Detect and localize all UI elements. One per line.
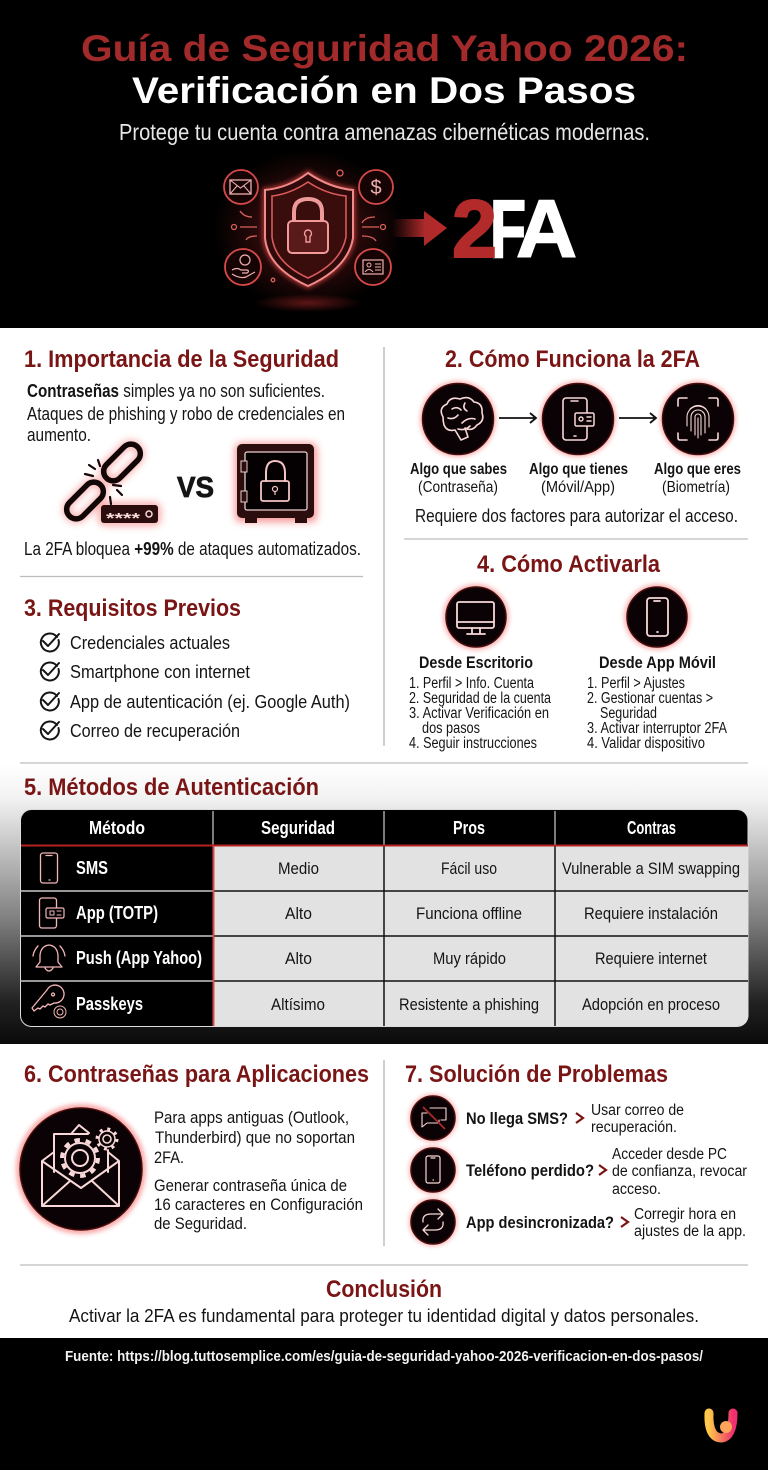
row: SMS: Vulnerable a SIM swapping <box>562 859 740 878</box>
versus label: VS <box>177 472 214 504</box>
steps: desktop: Desde Escritorio <box>419 653 533 672</box>
steps: mobile: Desde App Móvil <box>599 653 716 672</box>
2FA logotype <box>452 184 577 275</box>
title <box>81 28 688 111</box>
circuit lines <box>232 170 386 282</box>
panel: troubleshooting <box>405 1061 747 1246</box>
subtitle: Protege tu cuenta contra amenazas cibernéticas modernas. <box>119 119 650 145</box>
white content background <box>0 328 768 765</box>
icon: phone with card <box>540 381 616 457</box>
icon: broken chain <box>63 440 158 527</box>
heading 6: 6. Contraseñas para Aplicaciones <box>24 1061 369 1088</box>
intro text: Ataques de phishing y robo de credenciales en <box>27 404 345 424</box>
description text <box>154 1108 363 1233</box>
factor labels: (Biometría) <box>662 479 730 496</box>
factor labels: Algo que tienes <box>529 461 628 478</box>
problem: phone: de confianza, revocar <box>612 1163 747 1180</box>
heading 7: 7. Solución de Problemas <box>405 1061 668 1088</box>
table header: Seguridad <box>261 818 335 838</box>
hero illustration <box>213 150 403 312</box>
icon: envelope <box>224 170 258 204</box>
steps: desktop: 2. Seguridad de la cuenta <box>409 690 551 707</box>
checklist: App de autenticación (ej. Google Auth) <box>70 692 350 712</box>
steps: desktop: dos pasos <box>422 720 480 737</box>
steps: mobile: 3. Activar interruptor 2FA <box>587 720 728 737</box>
arrow to 2FA <box>392 211 447 246</box>
factor labels: Algo que sabes <box>410 461 507 478</box>
intro text: Contraseñas simples ya no son suficientes. <box>27 381 325 401</box>
table header: Contras <box>627 818 676 838</box>
intro text <box>27 381 345 445</box>
factor labels: (Contraseña) <box>418 479 498 496</box>
intro text: aumento. <box>27 425 91 445</box>
table header <box>89 818 676 838</box>
description text: Para apps antiguas (Outlook, <box>154 1108 349 1127</box>
row: Push: Push (App Yahoo) <box>76 948 202 968</box>
row: Passkeys: Altísimo <box>271 995 325 1014</box>
factor labels: Algo que eres <box>654 461 741 478</box>
description text: Thunderbird) que no soportan <box>155 1128 355 1147</box>
row: TOTP: App (TOTP) <box>76 903 158 923</box>
title: Guía de Seguridad Yahoo 2026: <box>81 28 688 69</box>
icon: fingerprint <box>660 381 736 457</box>
2FA logotype: 2 <box>452 184 497 275</box>
panel: app passwords <box>16 1061 369 1234</box>
icon: desktop <box>443 584 509 650</box>
row: Push <box>33 945 707 971</box>
row: SMS: SMS <box>76 858 108 878</box>
panel: como funciona <box>410 346 741 526</box>
row: Push: Requiere internet <box>595 949 707 968</box>
panel: importancia <box>24 346 361 559</box>
arrow <box>619 413 656 423</box>
table header: Método <box>89 818 145 838</box>
hero background <box>0 0 768 328</box>
icon: hand with coin <box>225 249 261 285</box>
icon: broken chain: **** <box>106 510 140 527</box>
problem: SMS: No llega SMS? <box>466 1109 568 1128</box>
brand logo <box>709 1413 733 1438</box>
section 5 background <box>0 765 768 1044</box>
row: TOTP <box>40 898 718 928</box>
row: SMS: Medio <box>278 859 319 878</box>
icon: dollar: $ <box>370 177 382 199</box>
problem: phone: acceso. <box>612 1181 661 1198</box>
row: Push: Muy rápido <box>433 949 506 968</box>
steps: mobile: Seguridad <box>600 705 657 722</box>
statistic text: La 2FA bloquea +99% de ataques automatizados. <box>24 539 361 559</box>
heading 5: 5. Métodos de Autenticación <box>24 774 319 801</box>
checklist: Correo de recuperación <box>70 721 240 741</box>
conclusion <box>69 1276 699 1326</box>
row: Passkeys: Passkeys <box>76 994 143 1014</box>
description text: 16 caracteres en Configuración <box>154 1195 363 1214</box>
footer background <box>0 1338 768 1470</box>
steps: desktop: 1. Perfil > Info. Cuenta <box>409 675 534 692</box>
checklist <box>41 633 350 741</box>
lower white background <box>0 1044 768 1338</box>
arrow <box>499 413 536 423</box>
icon: dollar <box>359 170 393 204</box>
row: SMS: Fácil uso <box>441 859 497 878</box>
factor labels: (Móvil/App) <box>541 479 615 496</box>
checklist: Smartphone con internet <box>70 662 250 682</box>
problem: SMS: Usar correo de <box>591 1102 684 1119</box>
light cells <box>213 846 748 1026</box>
row: Push: Alto <box>285 949 312 968</box>
row: SMS <box>40 853 740 883</box>
source line: Fuente: https://blog.tuttosemplice.com/es/guia-de-seguridad-yahoo-2026-verificacion-en-dos-pasos/ <box>65 1348 704 1365</box>
heading 2: 2. Cómo Funciona la 2FA <box>445 346 700 373</box>
row: TOTP: Funciona offline <box>416 904 522 923</box>
icon: mobile <box>624 584 690 650</box>
row: Passkeys <box>32 985 720 1018</box>
2FA logotype: F <box>490 184 526 275</box>
steps: mobile: 2. Gestionar cuentas > <box>587 690 713 707</box>
description text: 2FA. <box>154 1148 184 1167</box>
steps: mobile: 1. Perfil > Ajustes <box>587 675 685 692</box>
steps: mobile: 4. Validar dispositivo <box>587 735 705 752</box>
panel: requisitos <box>24 595 350 741</box>
icon: envelope with gears <box>16 1104 146 1234</box>
steps: desktop <box>409 653 551 752</box>
steps: desktop: 4. Seguir instrucciones <box>409 735 537 752</box>
problem: sync: ajustes de la app. <box>634 1223 746 1240</box>
problem: phone: Teléfono perdido? <box>466 1161 594 1180</box>
factor labels <box>410 461 741 496</box>
2FA logotype: A <box>516 184 577 275</box>
icon: id card <box>355 249 391 285</box>
row: TOTP: Requiere instalación <box>584 904 718 923</box>
conclusion: Conclusión <box>326 1276 442 1303</box>
row: TOTP: Alto <box>285 904 312 923</box>
table header: Pros <box>453 818 485 838</box>
conclusion: Activar la 2FA es fundamental para proteger tu identidad digital y datos personales. <box>69 1306 699 1326</box>
icon: shield with lock <box>265 173 353 286</box>
row: Passkeys: Resistente a phishing <box>399 995 539 1014</box>
heading 1: 1. Importancia de la Seguridad <box>24 346 339 373</box>
problem: phone <box>409 1146 747 1198</box>
problem: SMS: recuperación. <box>591 1119 677 1136</box>
problem: sync: App desincronizada? <box>466 1213 614 1232</box>
title: Verificación en Dos Pasos <box>132 70 636 111</box>
table grid <box>20 811 748 1026</box>
heading 3: 3. Requisitos Previos <box>24 595 241 622</box>
panel: como activarla <box>409 551 728 752</box>
icon: brain <box>420 381 496 457</box>
description text: de Seguridad. <box>154 1214 247 1233</box>
description text: Generar contraseña única de <box>154 1176 347 1195</box>
heading 4: 4. Cómo Activarla <box>477 551 661 578</box>
vertical divider <box>383 347 385 746</box>
methods table <box>20 810 748 1026</box>
steps: desktop: 3. Activar Verificación en <box>409 705 549 722</box>
problem: sync <box>409 1198 746 1246</box>
row: Passkeys: Adopción en proceso <box>582 995 720 1014</box>
problem: phone: Acceder desde PC <box>612 1146 727 1163</box>
icon: safe <box>235 443 317 523</box>
problem: sync: Corregir hora en <box>634 1206 736 1223</box>
checklist: Credenciales actuales <box>70 633 230 653</box>
problem: SMS <box>409 1094 684 1142</box>
steps: mobile <box>587 653 728 752</box>
